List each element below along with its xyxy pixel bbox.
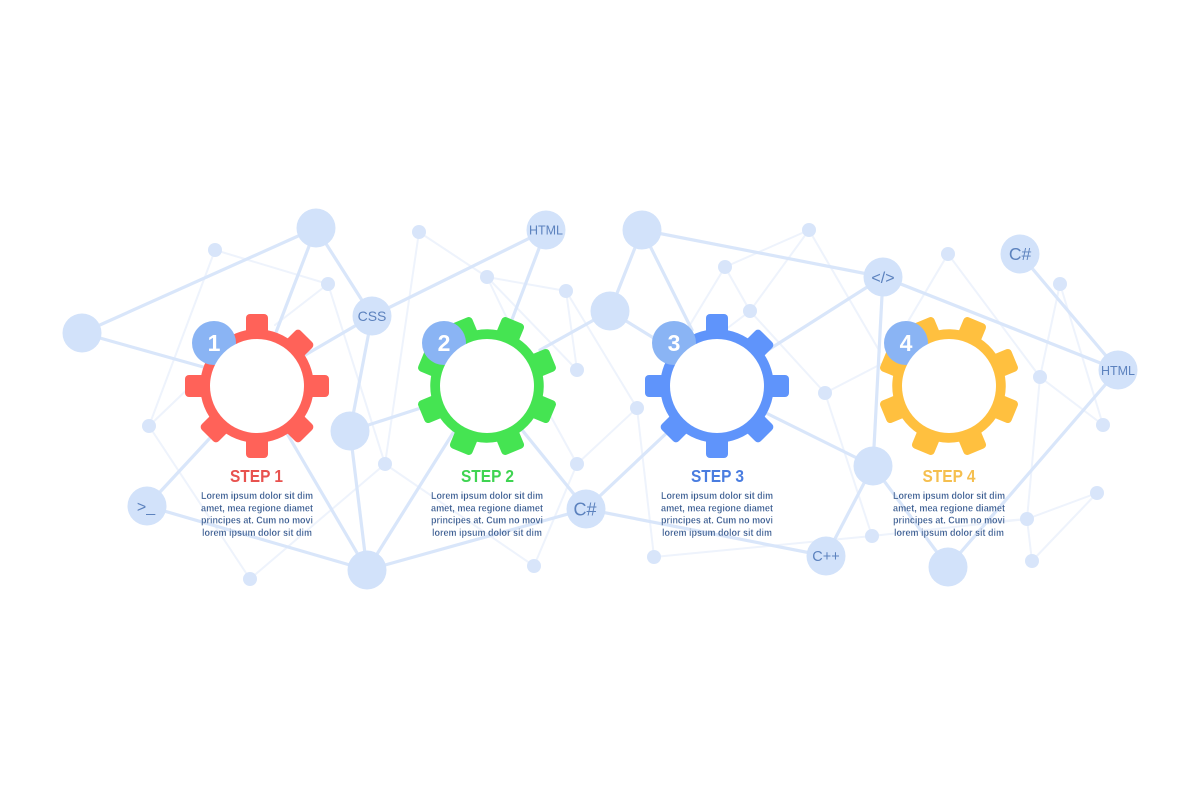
node: C# right: C# (1009, 244, 1031, 264)
node: HTML top (526, 210, 566, 250)
step 1 text: amet, mea regione diamet (201, 504, 314, 514)
step 1 text: principes at. Cum no movi (201, 516, 313, 526)
step 2 text: Lorem ipsum dolor sit dim (431, 491, 543, 502)
node: CSS (352, 296, 392, 336)
network: thick connections (82, 228, 1118, 570)
node: HTML top: HTML (529, 224, 563, 238)
step 1 text (201, 491, 314, 539)
step 4 gear (856, 293, 1042, 479)
node: code tag: </> (871, 270, 895, 287)
step 3 heading: STEP 3 (691, 466, 744, 486)
step 4 heading: STEP 4 (922, 466, 976, 486)
step 4 text: principes at. Cum no movi (893, 516, 1005, 526)
step 3 text: lorem ipsum dolor sit dim (662, 528, 772, 539)
step 2 heading: STEP 2 (461, 466, 514, 486)
step 3 text (661, 491, 774, 539)
step 2 text: principes at. Cum no movi (431, 516, 543, 526)
step 1 heading: STEP 1 (230, 466, 283, 486)
step 4 text: amet, mea regione diamet (893, 504, 1006, 514)
network: large nodes (62, 208, 968, 590)
step 1 gear (185, 314, 329, 458)
step 2 text (431, 491, 544, 539)
node: HTML right: HTML (1101, 364, 1135, 378)
step 3 gear (645, 314, 789, 458)
node: C# center (566, 490, 606, 528)
step 4 text (893, 491, 1006, 539)
node: code tag (864, 258, 902, 296)
node: C# center: C# (573, 500, 597, 520)
step 2 text: lorem ipsum dolor sit dim (432, 528, 542, 539)
node: terminal prompt: >_ (137, 499, 156, 516)
step 4 gear: 4 (900, 330, 913, 356)
node: C++: C++ (812, 549, 840, 565)
step 4 text: lorem ipsum dolor sit dim (894, 528, 1004, 539)
step 2 text: amet, mea regione diamet (431, 504, 544, 514)
step 3 gear: 3 (668, 330, 680, 356)
node: HTML right (1098, 350, 1138, 390)
network: thin background connections (149, 230, 1103, 579)
step 2 gear (394, 293, 580, 479)
node: C# right (1000, 234, 1040, 274)
step 1 gear: 1 (208, 330, 221, 356)
step 3 text: principes at. Cum no movi (661, 516, 773, 526)
step 3 text: Lorem ipsum dolor sit dim (661, 491, 773, 502)
step 1 text: Lorem ipsum dolor sit dim (201, 491, 313, 502)
node: CSS: CSS (358, 308, 386, 324)
node: C++ (806, 536, 846, 576)
step 2 gear: 2 (438, 330, 450, 356)
node: terminal prompt (128, 486, 166, 526)
step 4 text: Lorem ipsum dolor sit dim (893, 491, 1005, 502)
network: small nodes (142, 223, 1110, 586)
step 3 text: amet, mea regione diamet (661, 504, 774, 514)
step 1 text: lorem ipsum dolor sit dim (202, 528, 312, 539)
